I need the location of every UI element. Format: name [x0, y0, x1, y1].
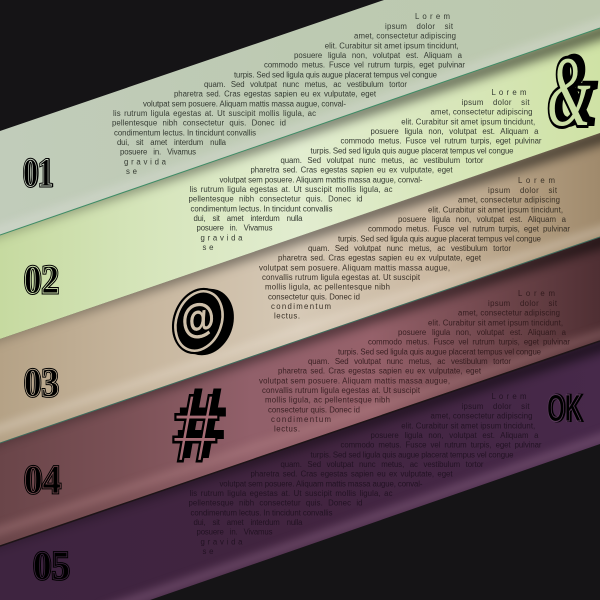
- number 01: 01: [23, 150, 53, 195]
- text block 5: [188, 392, 542, 556]
- text block 3: c o n d i m e n t u m: [271, 302, 331, 311]
- text block 2: pharetra sed. Cras egestas sapien eu ex vulputate, eget: [250, 166, 453, 175]
- number 05: 05: [33, 543, 70, 588]
- text block 3: elit. Curabitur sit amet ipsum tincidunt,: [428, 205, 563, 214]
- text block 5: condimentum lectus. In tincidunt convallis: [190, 508, 333, 517]
- icon: ampersand: &: [547, 36, 591, 147]
- text block 5: dui, sit amet interdum nulla: [194, 518, 303, 527]
- text block 5: pellentesque nibh consectetur quis. Donec id: [188, 499, 362, 508]
- text block 4: pharetra sed. Cras egestas sapien eu ex vulputate, eget: [278, 367, 482, 376]
- text block 1: pharetra sed. Cras egestas sapien eu ex vulputate, eget: [174, 90, 377, 99]
- text block 5: L o r e m: [492, 392, 526, 401]
- panel: band 1: [0, 0, 600, 244]
- panel: band 2: [0, 21, 600, 339]
- text block 3: mollis ligula, ac pellentesque nibh: [265, 283, 390, 292]
- text block 2: volutpat sem posuere. Aliquam mattis massa augue, conval-: [220, 175, 423, 184]
- text block 3: pharetra sed. Cras egestas sapien eu ex vulputate, eget: [278, 254, 482, 263]
- text block 3: commodo metus. Fusce vel rutrum turpis, eget pulvinar: [368, 225, 570, 234]
- text block 2: posuere ligula non, volutpat est. Aliquam a: [370, 127, 539, 136]
- text block 1: quam. Sed volutpat nunc metus, ac vestibulum tortor: [204, 80, 407, 89]
- text block 1: [112, 12, 465, 176]
- text block 4: [259, 289, 570, 434]
- text block 5: amet, consectetur adipiscing: [430, 412, 532, 421]
- text block 1: lis rutrum ligula egestas at. Ut suscipit mollis ligula, ac: [113, 109, 316, 118]
- text block 5: lis rutrum ligula egestas at. Ut suscipit mollis ligula, ac: [190, 489, 393, 498]
- text block 1: amet, consectetur adipiscing: [354, 32, 456, 41]
- text block 4: L o r e m: [518, 289, 555, 298]
- text block 5: s e: [202, 547, 214, 556]
- text block 2: amet, consectetur adipiscing: [430, 108, 532, 117]
- text block 2: posuere in. Vivamus: [196, 224, 273, 233]
- text block 2: g r a v i d a: [200, 233, 243, 242]
- text block 1: condimentum lectus. In tincidunt convallis: [114, 128, 256, 137]
- text block 2: quam. Sed volutpat nunc metus, ac vestibulum tortor: [280, 156, 484, 165]
- text block 3: consectetur quis. Donec id: [268, 292, 360, 301]
- text block 5: pharetra sed. Cras egestas sapien eu ex vulputate, eget: [250, 470, 453, 479]
- icon: ampersand: &: [547, 36, 591, 147]
- text block 4: ipsum dolor sit: [488, 299, 558, 308]
- text block 1: volutpat sem posuere. Aliquam mattis massa augue, conval-: [143, 99, 346, 108]
- panel: band 5: [0, 334, 600, 600]
- number 01: 01: [23, 150, 53, 195]
- text block 5: quam. Sed volutpat nunc metus, ac vestibulum tortor: [280, 460, 484, 469]
- text block 1: elit. Curabitur sit amet ipsum tincidunt,: [325, 41, 459, 50]
- text block 3: quam. Sed volutpat nunc metus, ac vestibulum tortor: [308, 244, 511, 253]
- text block 5: elit. Curabitur sit amet ipsum tincidunt,: [401, 421, 535, 430]
- text block 4: posuere ligula non, volutpat est. Aliquam a: [398, 328, 567, 337]
- text block 1: s e: [126, 167, 137, 176]
- number 01: 01: [24, 150, 54, 195]
- text block 3: ipsum dolor sit: [488, 186, 558, 195]
- icon: hash: #: [172, 374, 219, 481]
- text block 3: lectus.: [274, 312, 300, 321]
- text block 4: commodo metus. Fusce vel rutrum turpis, eget pulvinar: [368, 338, 570, 347]
- text block 2: pellentesque nibh consectetur quis. Donec id: [188, 195, 362, 204]
- text block 4: elit. Curabitur sit amet ipsum tincidunt,: [428, 318, 563, 327]
- text block 1: dui, sit amet interdum nulla: [117, 138, 227, 147]
- text block 3: posuere ligula non, volutpat est. Aliquam a: [398, 215, 567, 224]
- text block 4: consectetur quis. Donec id: [268, 405, 360, 414]
- icon: hash: #: [178, 369, 225, 476]
- text block 2: dui, sit amet interdum nulla: [194, 214, 303, 223]
- text block 5: volutpat sem posuere. Aliquam mattis massa augue, conval-: [220, 479, 423, 488]
- text block 1: g r a v i d a: [124, 157, 167, 166]
- text block 4: amet, consectetur adipiscing: [458, 309, 560, 318]
- text block 5: commodo metus. Fusce vel rutrum turpis, eget pulvinar: [340, 441, 542, 450]
- text block 1: posuere in. Vivamus: [120, 148, 196, 157]
- text block 2: lis rutrum ligula egestas at. Ut suscipit mollis ligula, ac: [190, 185, 393, 194]
- text block 4: turpis. Sed sed ligula quis augue placerat tempus vel congue: [338, 347, 541, 356]
- text block 4: lectus.: [274, 425, 300, 434]
- number 02: 02: [24, 257, 59, 302]
- text block 4: convallis rutrum ligula egestas at. Ut suscipit: [262, 386, 421, 395]
- text block 2: condimentum lectus. In tincidunt convallis: [190, 204, 333, 213]
- icon: ampersand: &: [553, 34, 597, 145]
- text block 1: turpis. Sed sed ligula quis augue placerat tempus vel congue: [234, 70, 437, 79]
- text block 3: L o r e m: [518, 176, 555, 185]
- text block 3: convallis rutrum ligula egestas at. Ut suscipit: [262, 273, 421, 282]
- text block 2: commodo metus. Fusce vel rutrum turpis, eget pulvinar: [340, 137, 542, 146]
- text block 5: posuere ligula non, volutpat est. Aliquam a: [370, 431, 539, 440]
- text block 2: s e: [202, 243, 214, 252]
- number 04: 04: [24, 457, 61, 502]
- number 03: 03: [24, 360, 59, 405]
- text block 3: turpis. Sed sed ligula quis augue placerat tempus vel congue: [338, 234, 541, 243]
- text block 5: ipsum dolor sit: [462, 402, 530, 411]
- text block 5: turpis. Sed sed ligula quis augue placerat tempus vel congue: [310, 450, 514, 459]
- text block 2: elit. Curabitur sit amet ipsum tincidunt,: [401, 117, 535, 126]
- text block 1: pellentesque nibh consectetur quis. Donec id: [112, 119, 286, 128]
- text block 1: commodo metus. Fusce vel rutrum turpis, eget pulvinar: [264, 61, 465, 70]
- number 02: 02: [24, 257, 59, 302]
- icon: at sign: [163, 280, 243, 363]
- text block 4: quam. Sed volutpat nunc metus, ac vestibulum tortor: [308, 357, 511, 366]
- number 05: 05: [33, 543, 70, 588]
- icon: hash: #: [172, 374, 219, 481]
- text block 2: L o r e m: [492, 88, 526, 97]
- text block 3: [259, 176, 570, 321]
- text block 1: L o r e m: [415, 12, 450, 21]
- text block 4: c o n d i m e n t u m: [271, 415, 331, 424]
- panel: band 3: [0, 126, 600, 443]
- text block 1: ipsum dolor sit: [385, 22, 454, 31]
- number 03: 03: [24, 360, 59, 405]
- text block 1: posuere ligula non, volutpat est. Aliquam a: [294, 51, 463, 60]
- text block 5: g r a v i d a: [200, 537, 243, 546]
- number 04: 04: [24, 457, 61, 502]
- icon: at sign: @: [178, 295, 218, 343]
- text block 4: volutpat sem posuere. Aliquam mattis massa augue,: [259, 376, 450, 385]
- text block 3: amet, consectetur adipiscing: [458, 196, 560, 205]
- text block 3: volutpat sem posuere. Aliquam mattis massa augue,: [259, 263, 450, 272]
- text block 2: turpis. Sed sed ligula quis augue placerat tempus vel congue: [310, 146, 514, 155]
- icon: OK: [547, 388, 583, 430]
- text block 4: mollis ligula, ac pellentesque nibh: [265, 396, 390, 405]
- text block 2: [188, 88, 542, 252]
- text block 2: ipsum dolor sit: [462, 98, 530, 107]
- panel: band 4: [0, 230, 600, 546]
- text block 5: posuere in. Vivamus: [196, 528, 273, 537]
